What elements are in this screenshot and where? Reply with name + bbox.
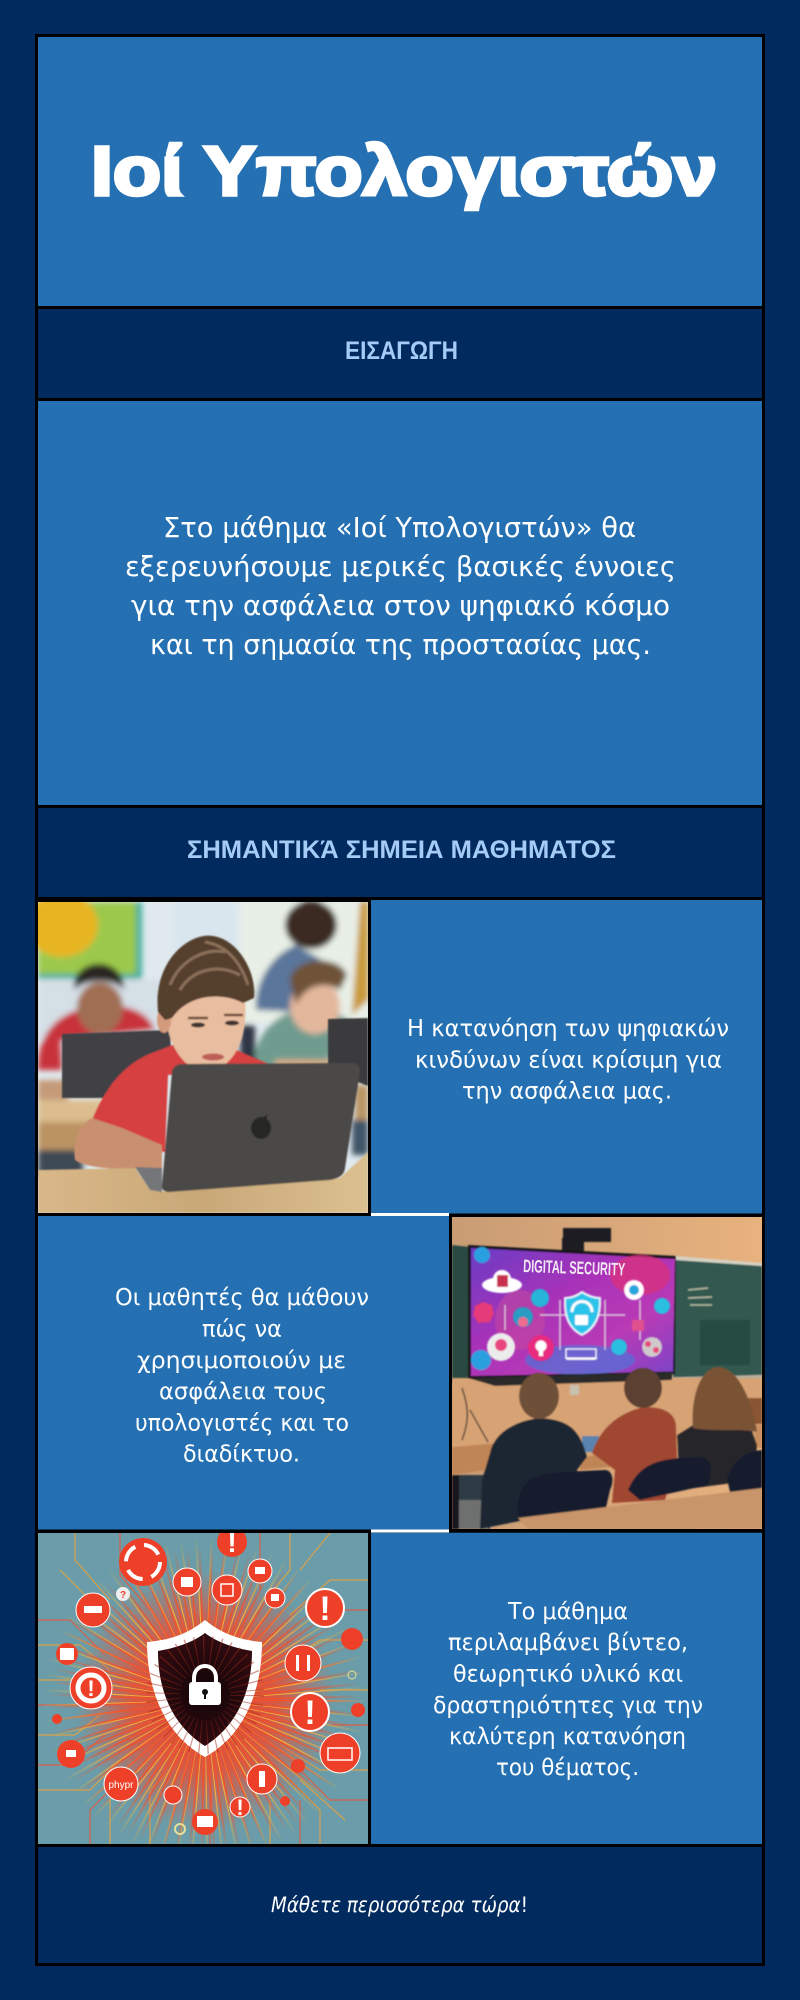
- panel: key points heading: [38, 808, 762, 897]
- text block: introduction paragraph: για την ασφάλεια στον ψηφιακό κόσμο: [131, 589, 670, 622]
- panel: footer: [38, 1847, 762, 1963]
- text block: point one: κινδύνων είναι κρίσιμη για: [415, 1046, 722, 1074]
- text block: point one: την ασφάλεια μας.: [462, 1076, 672, 1104]
- heading: title text: Ιοί Υπολογιστών: [91, 132, 717, 210]
- illustration: shield with lock and threat icons: !: [87, 1676, 95, 1701]
- screen heading: DIGITAL SECURITY: [523, 1256, 625, 1280]
- text block: point three: [433, 1597, 703, 1781]
- text block: introduction paragraph: Στο μάθημα «Ιοί Υπολογιστών» θα: [163, 511, 636, 544]
- text block: point two: [115, 1283, 369, 1468]
- illustration: shield with lock and threat icons: [38, 1527, 368, 1844]
- screen icon: shield: [565, 1292, 600, 1335]
- panel: introduction heading: [38, 309, 762, 398]
- illustration: shield with lock and threat icons: ?: [120, 1590, 126, 1601]
- threat icons: [52, 1527, 365, 1835]
- text block: point one: [407, 1014, 729, 1104]
- panel: introduction text: [38, 401, 762, 805]
- text block: point two: διαδίκτυο.: [183, 1440, 300, 1468]
- divider: white line one: [371, 1213, 449, 1216]
- photo: student with laptop: [26, 893, 368, 1213]
- text block: point three: δραστηριότητες για την: [433, 1691, 703, 1719]
- text block: introduction paragraph: [125, 511, 676, 661]
- text block: point three: καλύτερη κατανόηση: [449, 1722, 686, 1750]
- text block: introduction paragraph: εξερευνήσουμε μερικές βασικές έννοιες: [125, 550, 676, 583]
- shield: [147, 1620, 262, 1757]
- classroom furniture and students: [452, 1367, 762, 1529]
- text block: point one: Η κατανόηση των ψηφιακών: [407, 1014, 729, 1042]
- text block: point two: ασφάλεια τους: [159, 1377, 327, 1405]
- panel: title: [38, 37, 762, 306]
- photo: classroom watching digital security screen: [452, 1217, 762, 1529]
- text block: point two: πώς να: [202, 1314, 282, 1342]
- screen icons: circles: [473, 1270, 670, 1361]
- illustration: shield with lock and threat icons: !: [227, 1527, 237, 1558]
- text block: point two: Οι μαθητές θα μάθουν: [115, 1283, 369, 1311]
- illustration: shield with lock and threat icons: phypr: [108, 1780, 134, 1791]
- illustration: shield with lock and threat icons: !: [236, 1795, 244, 1820]
- illustration: shield with lock and threat icons: !: [304, 1694, 316, 1732]
- illustration: shield with lock and threat icons: !: [319, 1590, 331, 1628]
- divider: white line two: [371, 1530, 449, 1532]
- text block: point three: περιλαμβάνει βίντεο,: [448, 1628, 688, 1656]
- text block: point two: χρησιμοποιούν με: [137, 1346, 346, 1374]
- text block: call to action: Μάθετε περισσότερα τώρα!: [271, 1893, 528, 1918]
- text block: point three: του θέματος.: [496, 1753, 639, 1781]
- padlock: [189, 1666, 221, 1705]
- circuit traces: [38, 1533, 368, 1844]
- text block: point three: θεωρητικό υλικό και: [453, 1660, 683, 1688]
- text block: introduction paragraph: και τη σημασία της προστασίας μας.: [150, 628, 651, 661]
- text block: point three: Το μάθημα: [507, 1597, 628, 1625]
- panel: point one: [371, 900, 762, 1214]
- panel: point three: [371, 1533, 762, 1844]
- heading: key points: ΣΗΜΑΝΤΙΚΆ ΣΗΜΕΙΑ ΜΑΘΗΜΑΤΟΣ: [187, 836, 616, 864]
- panel: point two: [38, 1216, 449, 1530]
- text block: point two: υπολογιστές και το: [135, 1408, 349, 1436]
- heading: introduction: ΕΙΣΑΓΩΓΗ: [345, 337, 458, 365]
